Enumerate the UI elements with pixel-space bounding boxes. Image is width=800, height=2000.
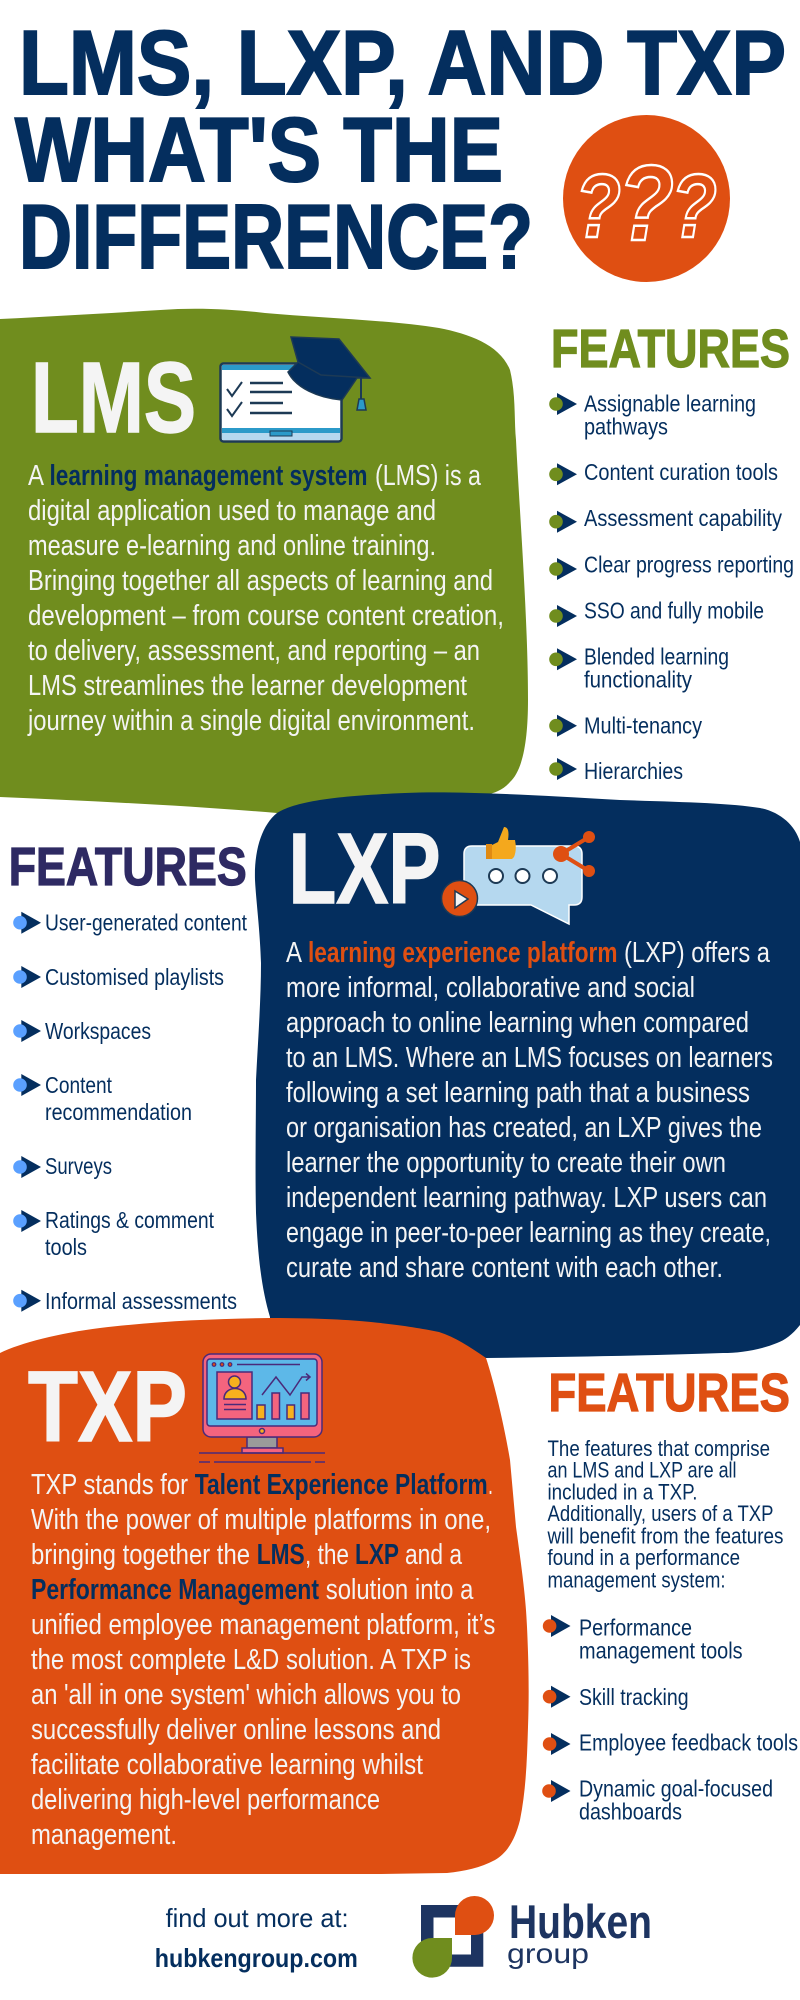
- bullet list: TXP features: dashboards: [579, 1798, 682, 1824]
- bullet list: LMS features: pathways: [584, 413, 668, 439]
- text block: TXP features intro: management system:: [548, 1567, 726, 1592]
- text block: LXP description: [286, 937, 773, 1284]
- panel: TXP: [0, 1318, 529, 1874]
- text block: TXP description: , the: [305, 1539, 349, 1571]
- panel: LXP: [255, 792, 800, 1358]
- heading: TXP: TXP: [28, 1351, 187, 1463]
- text block: TXP description: LMS: [257, 1539, 305, 1571]
- text block: TXP description: unified employee management platform, it’s: [31, 1609, 495, 1641]
- text block: LMS description: learning management system: [50, 460, 368, 492]
- bullet list: LMS features: Assignable learning: [584, 391, 756, 417]
- panel: TXP features: [542, 1363, 798, 1824]
- bullet list: LXP features: tools: [45, 1234, 87, 1260]
- bullet list: TXP features: Performance: [579, 1615, 692, 1641]
- text block: LMS description: to delivery, assessment, and reporting – an: [28, 635, 480, 667]
- footer call to action: [155, 1903, 358, 1973]
- bullet list: LXP features: [13, 910, 248, 1314]
- title: DIFFERENCE?: [19, 187, 533, 288]
- text block: TXP description: With the power of multiple platforms in one,: [31, 1504, 491, 1536]
- heading: LXP: LXP: [288, 813, 440, 925]
- bullet list: LXP features: recommendation: [45, 1099, 192, 1125]
- text block: LMS description: (LMS) is a: [375, 460, 482, 492]
- text block: TXP description: [31, 1469, 495, 1851]
- text block: TXP description: delivering high-level performance: [31, 1784, 380, 1816]
- bullet list: LMS features: functionality: [584, 666, 692, 692]
- bullet list: LMS features: [549, 391, 794, 784]
- bullet list: LXP features: Ratings & comment: [45, 1207, 215, 1233]
- text block: TXP description: bringing together the: [31, 1539, 250, 1571]
- icon: monitor with dashboard: [199, 1354, 325, 1462]
- icon: question marks circle: ?: [671, 157, 717, 257]
- text block: TXP features intro: found in a performance: [548, 1545, 740, 1570]
- text block: LXP description: A: [286, 937, 303, 969]
- bullet list: LXP features: Workspaces: [45, 1018, 151, 1044]
- text block: TXP description: successfully deliver online lessons and: [31, 1714, 441, 1746]
- text block: TXP description: management.: [31, 1819, 177, 1851]
- panel: LMS: [0, 309, 528, 820]
- text block: LXP description: (LXP) offers a: [624, 937, 771, 969]
- text block: TXP description: an 'all in one system' which allows you to: [31, 1679, 461, 1711]
- bullet list: TXP features: [542, 1615, 798, 1824]
- heading: LXP features: FEATURES: [9, 837, 247, 897]
- text block: TXP features intro: included in a TXP.: [548, 1479, 698, 1504]
- panel: LMS features: [549, 319, 794, 784]
- text block: TXP description: facilitate collaborative learning whilst: [31, 1749, 423, 1781]
- bullet list: LMS features: Hierarchies: [584, 758, 683, 784]
- icon: question marks circle: [563, 115, 730, 282]
- text block: TXP description: the most complete L&D solution. A TXP is: [31, 1644, 471, 1676]
- text block: LMS description: Bringing together all aspects of learning and: [28, 565, 493, 597]
- icon: laptop with graduation cap: [220, 337, 370, 442]
- footer call to action: hubkengroup.com: [155, 1943, 358, 1973]
- bullet list: LXP features: Customised playlists: [45, 964, 224, 990]
- text block: TXP description: TXP stands for: [31, 1469, 188, 1501]
- icon: question marks circle: ?: [618, 142, 674, 263]
- logo: Hubken group: Hubken: [509, 1895, 652, 1948]
- bullet list: LXP features: User-generated content: [45, 910, 248, 936]
- text block: LMS description: development – from course content creation,: [28, 600, 504, 632]
- panel: LXP features: [9, 837, 248, 1314]
- icon: chat bubble with like, share and play: [442, 827, 595, 924]
- bullet list: TXP features: Dynamic goal-focused: [579, 1776, 773, 1802]
- text block: TXP description: .: [488, 1469, 493, 1501]
- bullet list: TXP features: Skill tracking: [579, 1684, 689, 1710]
- text block: TXP description: LXP: [355, 1539, 399, 1571]
- bullet list: LMS features: SSO and fully mobile: [584, 597, 764, 623]
- bullet list: LXP features: Surveys: [45, 1153, 112, 1179]
- text block: LMS description: LMS streamlines the learner development: [28, 670, 467, 702]
- text block: LXP description: learning experience platform: [308, 937, 618, 969]
- text block: LMS description: journey within a single digital environment.: [27, 705, 475, 737]
- logo: Hubken group: [412, 1895, 652, 1978]
- text block: TXP features intro: an LMS and LXP are all: [548, 1458, 736, 1483]
- text block: LMS description: digital application used to manage and: [28, 495, 436, 527]
- text block: TXP description: and a: [405, 1539, 463, 1571]
- logo: Hubken group: group: [507, 1938, 589, 1969]
- bullet list: LMS features: Blended learning: [584, 643, 729, 669]
- text block: TXP description: Performance Management: [31, 1574, 319, 1606]
- footer call to action: find out more at:: [166, 1903, 349, 1933]
- title: WHAT'S THE: [15, 100, 503, 201]
- text block: TXP description: solution into a: [326, 1574, 474, 1606]
- title: [15, 13, 786, 288]
- text block: LMS description: measure e-learning and online training.: [28, 530, 436, 562]
- icon: question marks circle: ?: [575, 157, 621, 257]
- bullet list: LXP features: Content: [45, 1072, 113, 1098]
- bullet list: LXP features: Informal assessments: [45, 1288, 237, 1314]
- text block: TXP description: Talent Experience Platform: [195, 1469, 488, 1501]
- bullet list: LMS features: Multi-tenancy: [584, 712, 702, 738]
- text block: LMS description: [27, 460, 504, 737]
- bullet list: TXP features: management tools: [579, 1637, 743, 1663]
- text block: LXP description: more informal, collaborative and social: [286, 972, 695, 1004]
- text block: LMS description: A: [28, 460, 45, 492]
- text block: TXP features intro: [547, 1436, 784, 1592]
- heading: LMS: LMS: [31, 342, 196, 454]
